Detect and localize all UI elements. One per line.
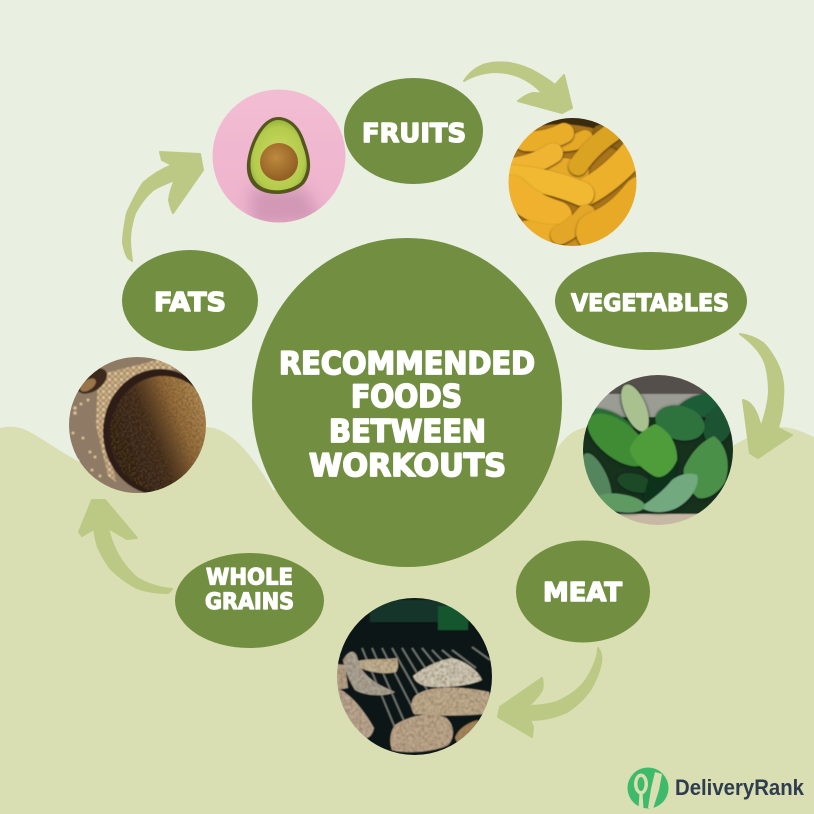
label: vegetables: VEGETABLES [571,289,729,317]
icon: plate with spoon and fork [628,768,668,809]
photo: spinach [583,375,733,525]
label: whole grains: GRAINS [205,590,294,615]
label: whole grains [175,553,324,648]
title: FOODS [351,379,462,415]
label: vegetables [555,252,747,350]
arrow: vegetables to spinach [740,334,792,458]
arrow: fruits to vegetables [464,62,572,113]
photo: avocado [210,88,350,226]
title: RECOMMENDED [279,346,535,382]
photo: quinoa bowl [69,357,206,493]
background hill [0,427,814,814]
label: fruits: FRUITS [362,119,466,149]
title: BETWEEN [329,414,486,450]
label: whole grains: WHOLE [206,566,293,590]
title [279,346,535,484]
title: WORKOUTS [309,448,506,484]
label: fruits [344,78,483,184]
arrow: fats to avocado [123,152,203,261]
logo: DeliveryRank [628,768,805,809]
label: fats [122,250,258,351]
label: meat: MEAT [543,578,622,608]
arrow: whole grains to quinoa [79,500,172,593]
center circle with title [252,238,562,567]
photo: grilled chicken [335,596,495,758]
photo: bananas [508,118,636,246]
arrow: meat to chicken [498,648,601,737]
wordmark: DeliveryRank [675,775,805,800]
label: meat [516,540,650,642]
label: fats: FATS [154,288,226,318]
